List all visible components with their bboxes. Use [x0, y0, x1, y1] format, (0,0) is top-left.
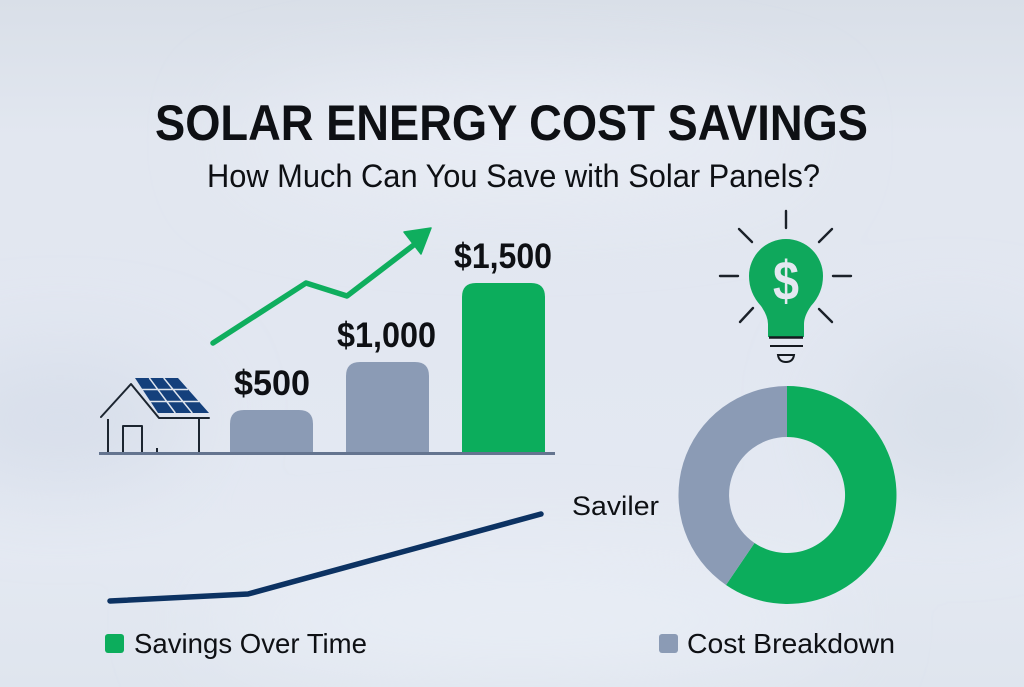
bar chart: savings amounts	[99, 237, 555, 455]
label: $500: $500	[234, 364, 310, 403]
label: $1,500: $1,500	[454, 237, 552, 276]
donut slice: cost	[678, 386, 787, 585]
bar: $500	[230, 410, 313, 453]
donut slice: savings	[726, 386, 896, 604]
title: SOLAR ENERGY COST SAVINGS	[155, 95, 868, 151]
donut chart: cost breakdown	[678, 386, 896, 604]
axis baseline	[99, 452, 555, 455]
legend: cost breakdown: Cost Breakdown	[687, 628, 895, 659]
label: $1,000: $1,000	[337, 316, 436, 355]
label: Saviler: Saviler	[572, 491, 659, 521]
icon: house with solar panels	[101, 378, 209, 453]
icon: light bulb with dollar sign: $	[773, 249, 799, 312]
arrow: rising green trend	[213, 228, 431, 343]
icon: light bulb with dollar sign	[720, 211, 851, 362]
line chart: savings over time	[110, 514, 541, 601]
bar: $1,500	[462, 283, 545, 453]
subtitle: How Much Can You Save with Solar Panels?	[207, 158, 820, 194]
legend: savings over time: Savings Over Time	[134, 628, 367, 659]
bar: $1,000	[346, 362, 429, 453]
